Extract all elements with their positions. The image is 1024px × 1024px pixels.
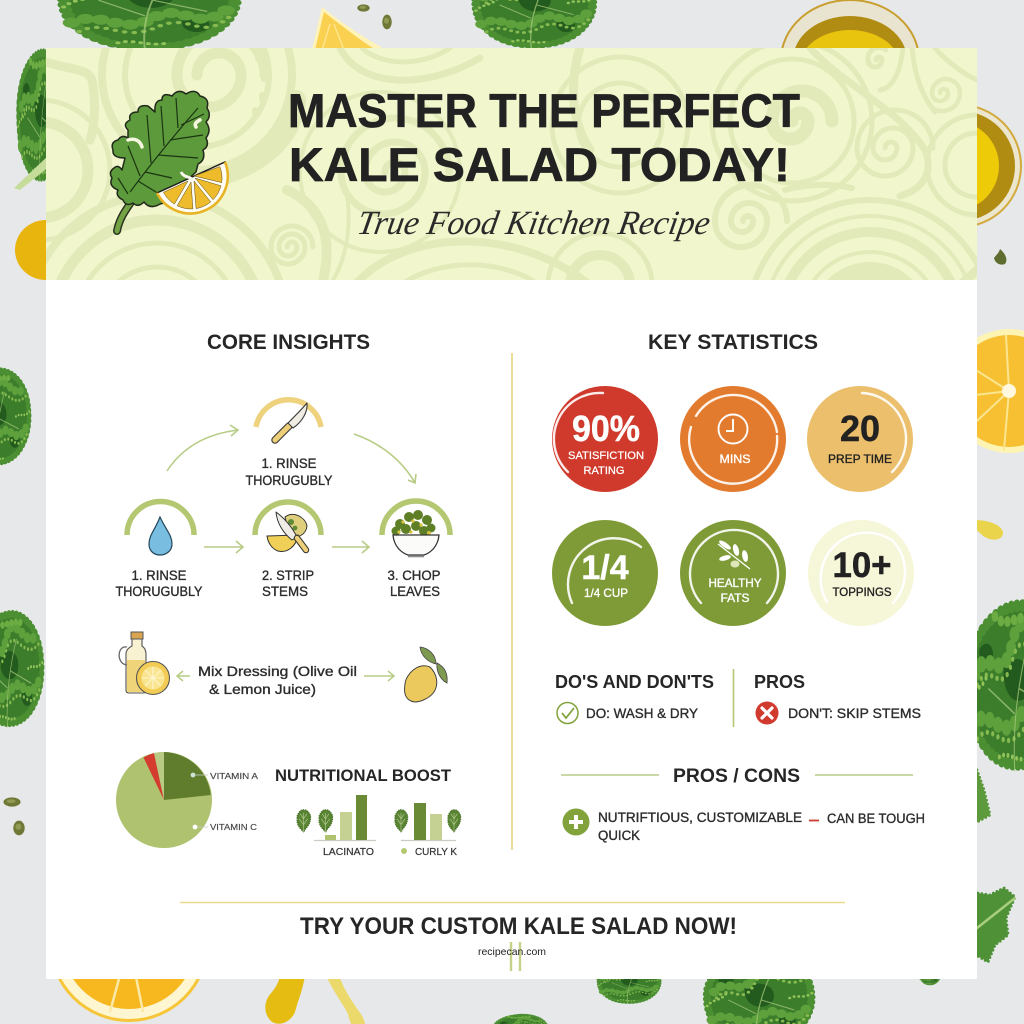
icon: knife bbox=[275, 403, 307, 440]
arrow: rinse to strip bbox=[204, 541, 243, 553]
oil drop right bbox=[975, 520, 1003, 540]
panel: do's and don'ts bbox=[555, 669, 921, 727]
seeds left bbox=[3, 797, 25, 835]
stat: 90% satisfaction: SATISFICTION bbox=[568, 450, 644, 462]
stat: healthy fats: HEALTHY bbox=[708, 576, 762, 590]
step: chop leaves: 3. CHOP bbox=[388, 568, 440, 583]
panel: header banner bbox=[46, 48, 977, 280]
step: rinse (top) with knife: 1. RINSE bbox=[262, 456, 316, 471]
stat: healthy fats: FATS bbox=[720, 591, 750, 605]
dressing text bbox=[198, 664, 357, 697]
pie labels: VITAMIN A bbox=[210, 771, 258, 781]
stat: 10+ toppings: TOPPINGS bbox=[832, 585, 892, 599]
bar chart: lacinato bbox=[297, 795, 376, 858]
lemon right bbox=[947, 329, 1024, 453]
step: rinse (top) with knife bbox=[246, 400, 332, 488]
icon: fork bbox=[511, 942, 520, 971]
icon: lemon bbox=[405, 647, 447, 702]
stat: 90% satisfaction bbox=[552, 386, 658, 492]
pie chart bbox=[116, 752, 258, 848]
footer rule bbox=[180, 902, 845, 904]
stat: mins bbox=[680, 386, 786, 492]
icon: cross bbox=[756, 702, 778, 724]
bar chart: curly kale bbox=[395, 803, 460, 858]
bar chart: curly kale: CURLY K bbox=[415, 847, 457, 858]
icon: check bbox=[557, 702, 578, 724]
heading: nutritional boost: NUTRITIONAL BOOST bbox=[275, 766, 452, 785]
step: rinse (top) with knife: THORUGUBLY bbox=[246, 473, 332, 488]
dressing text: Mix Dressing (Olive Oil bbox=[198, 664, 357, 679]
lemon wedge bbox=[157, 162, 228, 213]
seed right bbox=[994, 249, 1006, 265]
heading: do's and don'ts: DO'S AND DON'TS bbox=[555, 672, 714, 692]
panel: core insights bbox=[116, 331, 460, 858]
heading: core insights: CORE INSIGHTS bbox=[207, 331, 370, 354]
stat: 10+ toppings: 10+ bbox=[832, 546, 892, 585]
arrow: curve to top step bbox=[167, 425, 238, 471]
pros text: NUTRIFTIOUS, CUSTOMIZABLE bbox=[598, 810, 802, 825]
stat: mins: MINS bbox=[720, 452, 750, 466]
lemon bottom bbox=[49, 862, 209, 1022]
don't text: DON'T: SKIP STEMS bbox=[788, 706, 921, 721]
arrow: right bbox=[364, 671, 394, 681]
title bbox=[288, 84, 800, 191]
pros text bbox=[598, 810, 802, 843]
lemon wedge top bbox=[312, 7, 386, 50]
step: chop leaves: LEAVES bbox=[390, 584, 440, 599]
step: rinse with water drop bbox=[116, 502, 202, 599]
icon: minus bbox=[809, 820, 819, 822]
step: strip stems: 2. STRIP bbox=[262, 568, 314, 583]
stat: healthy fats bbox=[680, 520, 786, 626]
oil drips bottom bbox=[265, 975, 365, 1024]
panel: pros and cons bbox=[561, 766, 925, 843]
swirl background pattern bbox=[46, 48, 977, 280]
heading: pros / cons: PROS / CONS bbox=[673, 766, 800, 787]
stat: 1/4 cup bbox=[552, 520, 658, 626]
kale right bbox=[968, 605, 1024, 822]
heading: pros: PROS bbox=[754, 672, 805, 692]
stat: 20 prep time: PREP TIME bbox=[828, 452, 892, 466]
subtitle: True Food Kitchen Recipe bbox=[355, 204, 713, 242]
dressing row bbox=[119, 632, 447, 702]
icon: oil bottle with lemon bbox=[119, 632, 170, 694]
stat: 20 prep time bbox=[807, 386, 913, 492]
step: chop leaves bbox=[382, 501, 450, 599]
icon: clock bbox=[718, 414, 748, 444]
pie labels: VITAMIN C bbox=[210, 822, 257, 832]
do text: DO: WASH & DRY bbox=[586, 706, 698, 721]
kale top left bbox=[14, 0, 238, 190]
cons text: CAN BE TOUGH bbox=[827, 811, 925, 826]
light kale leaf right bbox=[970, 888, 1015, 962]
heading: key statistics: KEY STATISTICS bbox=[648, 331, 818, 354]
panel: key statistics bbox=[552, 331, 914, 626]
dressing text: & Lemon Juice) bbox=[209, 682, 316, 697]
pie labels bbox=[191, 771, 258, 832]
icon: olive branch bbox=[718, 539, 750, 569]
kale left bbox=[0, 371, 43, 728]
pros/cons rule bbox=[561, 774, 913, 776]
call to action: TRY YOUR CUSTOM KALE SALAD NOW! bbox=[300, 913, 737, 940]
step: rinse with water drop: 1. RINSE bbox=[132, 568, 186, 583]
step: strip stems: STEMS bbox=[262, 584, 308, 599]
arrow: curve to chop step bbox=[354, 434, 416, 483]
stat: 1/4 cup: 1/4 bbox=[581, 549, 629, 587]
step: rinse with water drop: THORUGUBLY bbox=[116, 584, 202, 599]
stat: 10+ toppings bbox=[808, 520, 914, 626]
divider bbox=[511, 353, 513, 850]
pros text: QUICK bbox=[598, 828, 640, 843]
icon: plus bbox=[562, 808, 590, 836]
stat: 1/4 cup: 1/4 CUP bbox=[584, 586, 628, 600]
icon: kale leaf with lemon wedge bbox=[110, 91, 228, 231]
oil bowl top bbox=[781, 0, 919, 120]
title: MASTER THE PERFECT bbox=[288, 84, 800, 137]
step: strip stems bbox=[255, 502, 321, 599]
bar chart: lacinato: LACINATO bbox=[323, 847, 374, 858]
stat: 90% satisfaction: RATING bbox=[584, 465, 624, 477]
seeds top bbox=[357, 4, 392, 29]
icon: salad bowl bbox=[392, 510, 439, 556]
icon: knife with lemon bbox=[267, 512, 307, 551]
stat: 90% satisfaction: 90% bbox=[572, 408, 640, 449]
arrow: left bbox=[177, 671, 190, 681]
kale top center bbox=[476, 0, 595, 49]
arrow: strip to chop bbox=[332, 541, 369, 553]
panel: main card bbox=[46, 280, 977, 979]
oil bowl right bbox=[899, 105, 1021, 227]
icon: water drop bbox=[149, 517, 172, 555]
title: KALE SALAD TODAY! bbox=[289, 138, 790, 191]
kale bottom bbox=[494, 954, 941, 1024]
oil splash left bbox=[15, 220, 77, 280]
vertical rule bbox=[732, 669, 734, 727]
stat: 20 prep time: 20 bbox=[840, 408, 880, 449]
source credit: recipecan.com bbox=[478, 946, 546, 958]
